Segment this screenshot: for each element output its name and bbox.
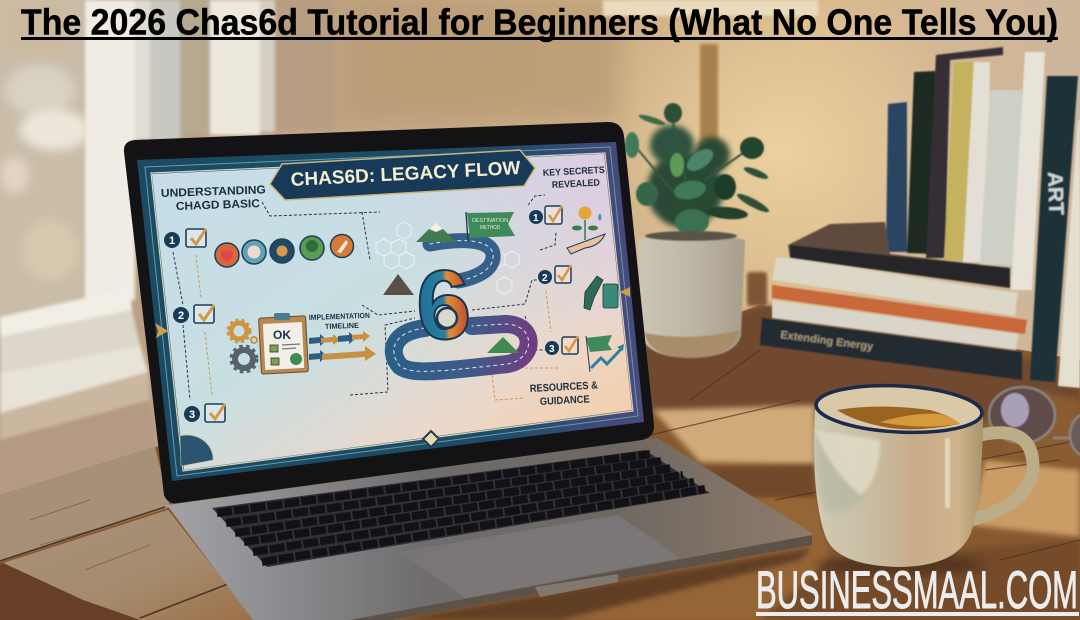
- ornament: corner sunburst: [180, 435, 213, 466]
- heading: resources and guidance: [530, 379, 598, 408]
- gears: [228, 320, 257, 372]
- inner rim: [815, 382, 983, 436]
- trackpad: [400, 515, 680, 598]
- hexagon pattern: [376, 222, 519, 294]
- book title ART: ART: [1043, 171, 1068, 215]
- upright books: [886, 102, 907, 252]
- potted plant: [625, 103, 771, 358]
- icon: fuel pump: [584, 276, 618, 310]
- mug shadow: [815, 555, 985, 575]
- icon row: [215, 234, 354, 267]
- heading: understanding: [161, 184, 266, 213]
- stacked books: [788, 222, 1010, 288]
- title banner: CHAS6D: LEGACY FLOW: [290, 158, 521, 191]
- leaves: [625, 103, 771, 235]
- clipboard: OK: [273, 328, 291, 342]
- coaster: [747, 272, 767, 306]
- screen frame lines: [151, 153, 633, 471]
- laptop base: [167, 438, 812, 620]
- pot: [637, 231, 745, 358]
- handle: [970, 433, 1033, 520]
- heading: understanding: UNDERSTANDING: [161, 184, 266, 200]
- flag: destination: [467, 212, 515, 238]
- window on the left: [0, 0, 335, 495]
- right checklist: 3: [549, 344, 555, 355]
- flag: destination: DESTINATION: [472, 218, 508, 224]
- ornament: side markers: [155, 287, 630, 338]
- coffee mug: [814, 382, 1080, 575]
- big numeral six: 6: [413, 248, 474, 361]
- clipboard: [259, 313, 308, 374]
- front lip: [350, 535, 812, 620]
- dashed connectors: [173, 195, 556, 400]
- left checklist: 3: [189, 409, 195, 421]
- keyboard: [212, 450, 710, 567]
- heading: key secrets: KEY SECRETS: [543, 165, 605, 179]
- title banner: [270, 150, 535, 200]
- front notch: [535, 574, 618, 597]
- coffee: [837, 406, 960, 429]
- right checklist: [529, 206, 578, 355]
- glasses: [989, 387, 1080, 457]
- mug body: [814, 410, 983, 567]
- laptop shadow: [392, 548, 812, 620]
- left checklist: [164, 229, 225, 422]
- left checklist: 2: [178, 310, 184, 322]
- road: [394, 241, 529, 371]
- heading: resources and guidance: GUIDANCE: [540, 393, 590, 408]
- flag: destination: METHOD: [480, 225, 500, 231]
- icon: flower in hand: [567, 206, 605, 254]
- laptop: [124, 122, 812, 620]
- ornament: bottom diamond: [423, 431, 439, 447]
- right checklist: 1: [533, 213, 539, 224]
- table: sunlit planks: [653, 405, 815, 465]
- implementation timeline: TIMELINE: [325, 321, 359, 331]
- heading: resources and guidance: RESOURCES &: [530, 379, 598, 395]
- implementation timeline: IMPLEMENTATION: [309, 311, 370, 322]
- right checklist: 2: [542, 273, 548, 284]
- stack of books: [760, 47, 1080, 388]
- stack of books: Extending Energy: [780, 329, 875, 353]
- icon: flag and growth chart: [586, 335, 624, 372]
- lamp: [603, 0, 818, 144]
- implementation timeline: [309, 311, 376, 362]
- table surface: [0, 305, 1080, 620]
- table: shaded back planks: [640, 305, 1080, 420]
- laptop lid bezel: [124, 122, 654, 503]
- screen: [137, 142, 644, 481]
- heading: understanding: CHAGD BASIC: [176, 198, 260, 213]
- heading: key secrets: [543, 165, 605, 191]
- left checklist: 1: [169, 235, 175, 247]
- table: left weathered planks: [0, 447, 170, 562]
- mountains and flag: [383, 212, 519, 353]
- heading: key secrets: REVEALED: [552, 177, 600, 191]
